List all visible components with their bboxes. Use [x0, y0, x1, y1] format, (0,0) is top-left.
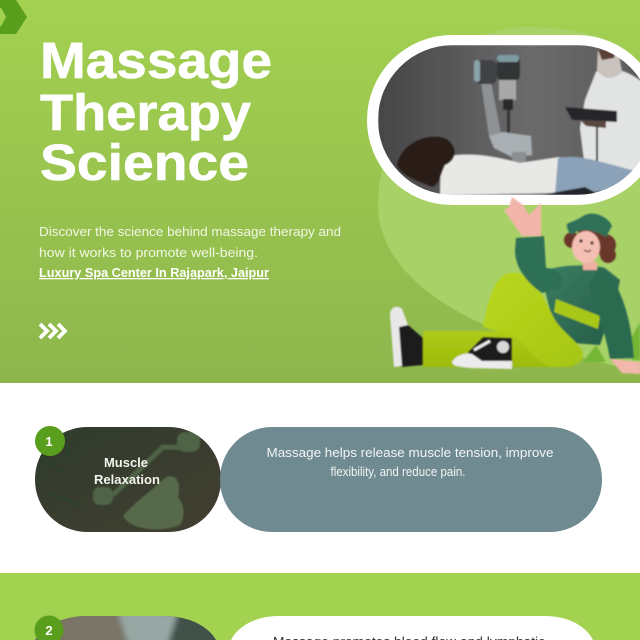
patient hair — [397, 137, 455, 187]
title: Therapy — [40, 84, 252, 141]
step 2 image pill — [35, 616, 216, 640]
step 1 number badge: 1 — [45, 434, 53, 449]
patient jeans — [555, 157, 640, 195]
photo: robot massage in white pill frame — [367, 35, 640, 205]
intro text block: Discover the science behind massage therapy and — [39, 224, 341, 239]
back shoe — [390, 307, 423, 367]
decorative corner chevron — [0, 0, 27, 34]
extended trouser leg — [423, 331, 583, 367]
near hand — [610, 359, 640, 374]
front shoe — [452, 337, 512, 369]
torso and hood — [540, 265, 620, 345]
title: Massage — [40, 32, 272, 89]
head — [564, 214, 616, 270]
waist band — [554, 299, 600, 329]
step 1 image pill: Muscle Relaxation — [35, 427, 221, 532]
robot arm — [474, 55, 532, 164]
step 1 number badge — [35, 426, 65, 456]
intro text block: how it works to promote well-being. — [39, 245, 258, 260]
section: white band — [0, 383, 640, 573]
title: Science — [40, 134, 249, 191]
step 1 description pill: flexibility, and reduce pain. — [330, 464, 466, 479]
patient shirt — [440, 155, 560, 195]
icon: triple chevron arrows — [40, 324, 65, 338]
section: green band — [0, 573, 640, 640]
bent trouser leg — [483, 273, 583, 367]
step 1 description pill: Massage helps release muscle tension, improve — [266, 445, 554, 460]
raised hand — [504, 197, 541, 236]
leaves — [583, 322, 640, 362]
illustration: seated character waving — [390, 197, 640, 374]
near arm — [588, 268, 634, 359]
technician in white coat — [565, 50, 640, 172]
step 1 image pill: Muscle Relaxation: Muscle — [104, 455, 148, 470]
intro text block — [39, 224, 341, 280]
step 1 description pill — [220, 427, 602, 532]
light background blob — [378, 27, 640, 372]
step 2 number badge — [34, 616, 64, 640]
intro text block: Luxury Spa Center In Rajapark, Jaipur — [39, 265, 269, 280]
title — [40, 32, 272, 191]
step 1 image pill: Muscle Relaxation: Relaxation — [94, 472, 160, 487]
hero background panel — [0, 0, 640, 383]
raised sleeve — [515, 236, 562, 293]
step 2 description pill — [231, 616, 593, 640]
step 2 number: 2 — [45, 623, 53, 638]
